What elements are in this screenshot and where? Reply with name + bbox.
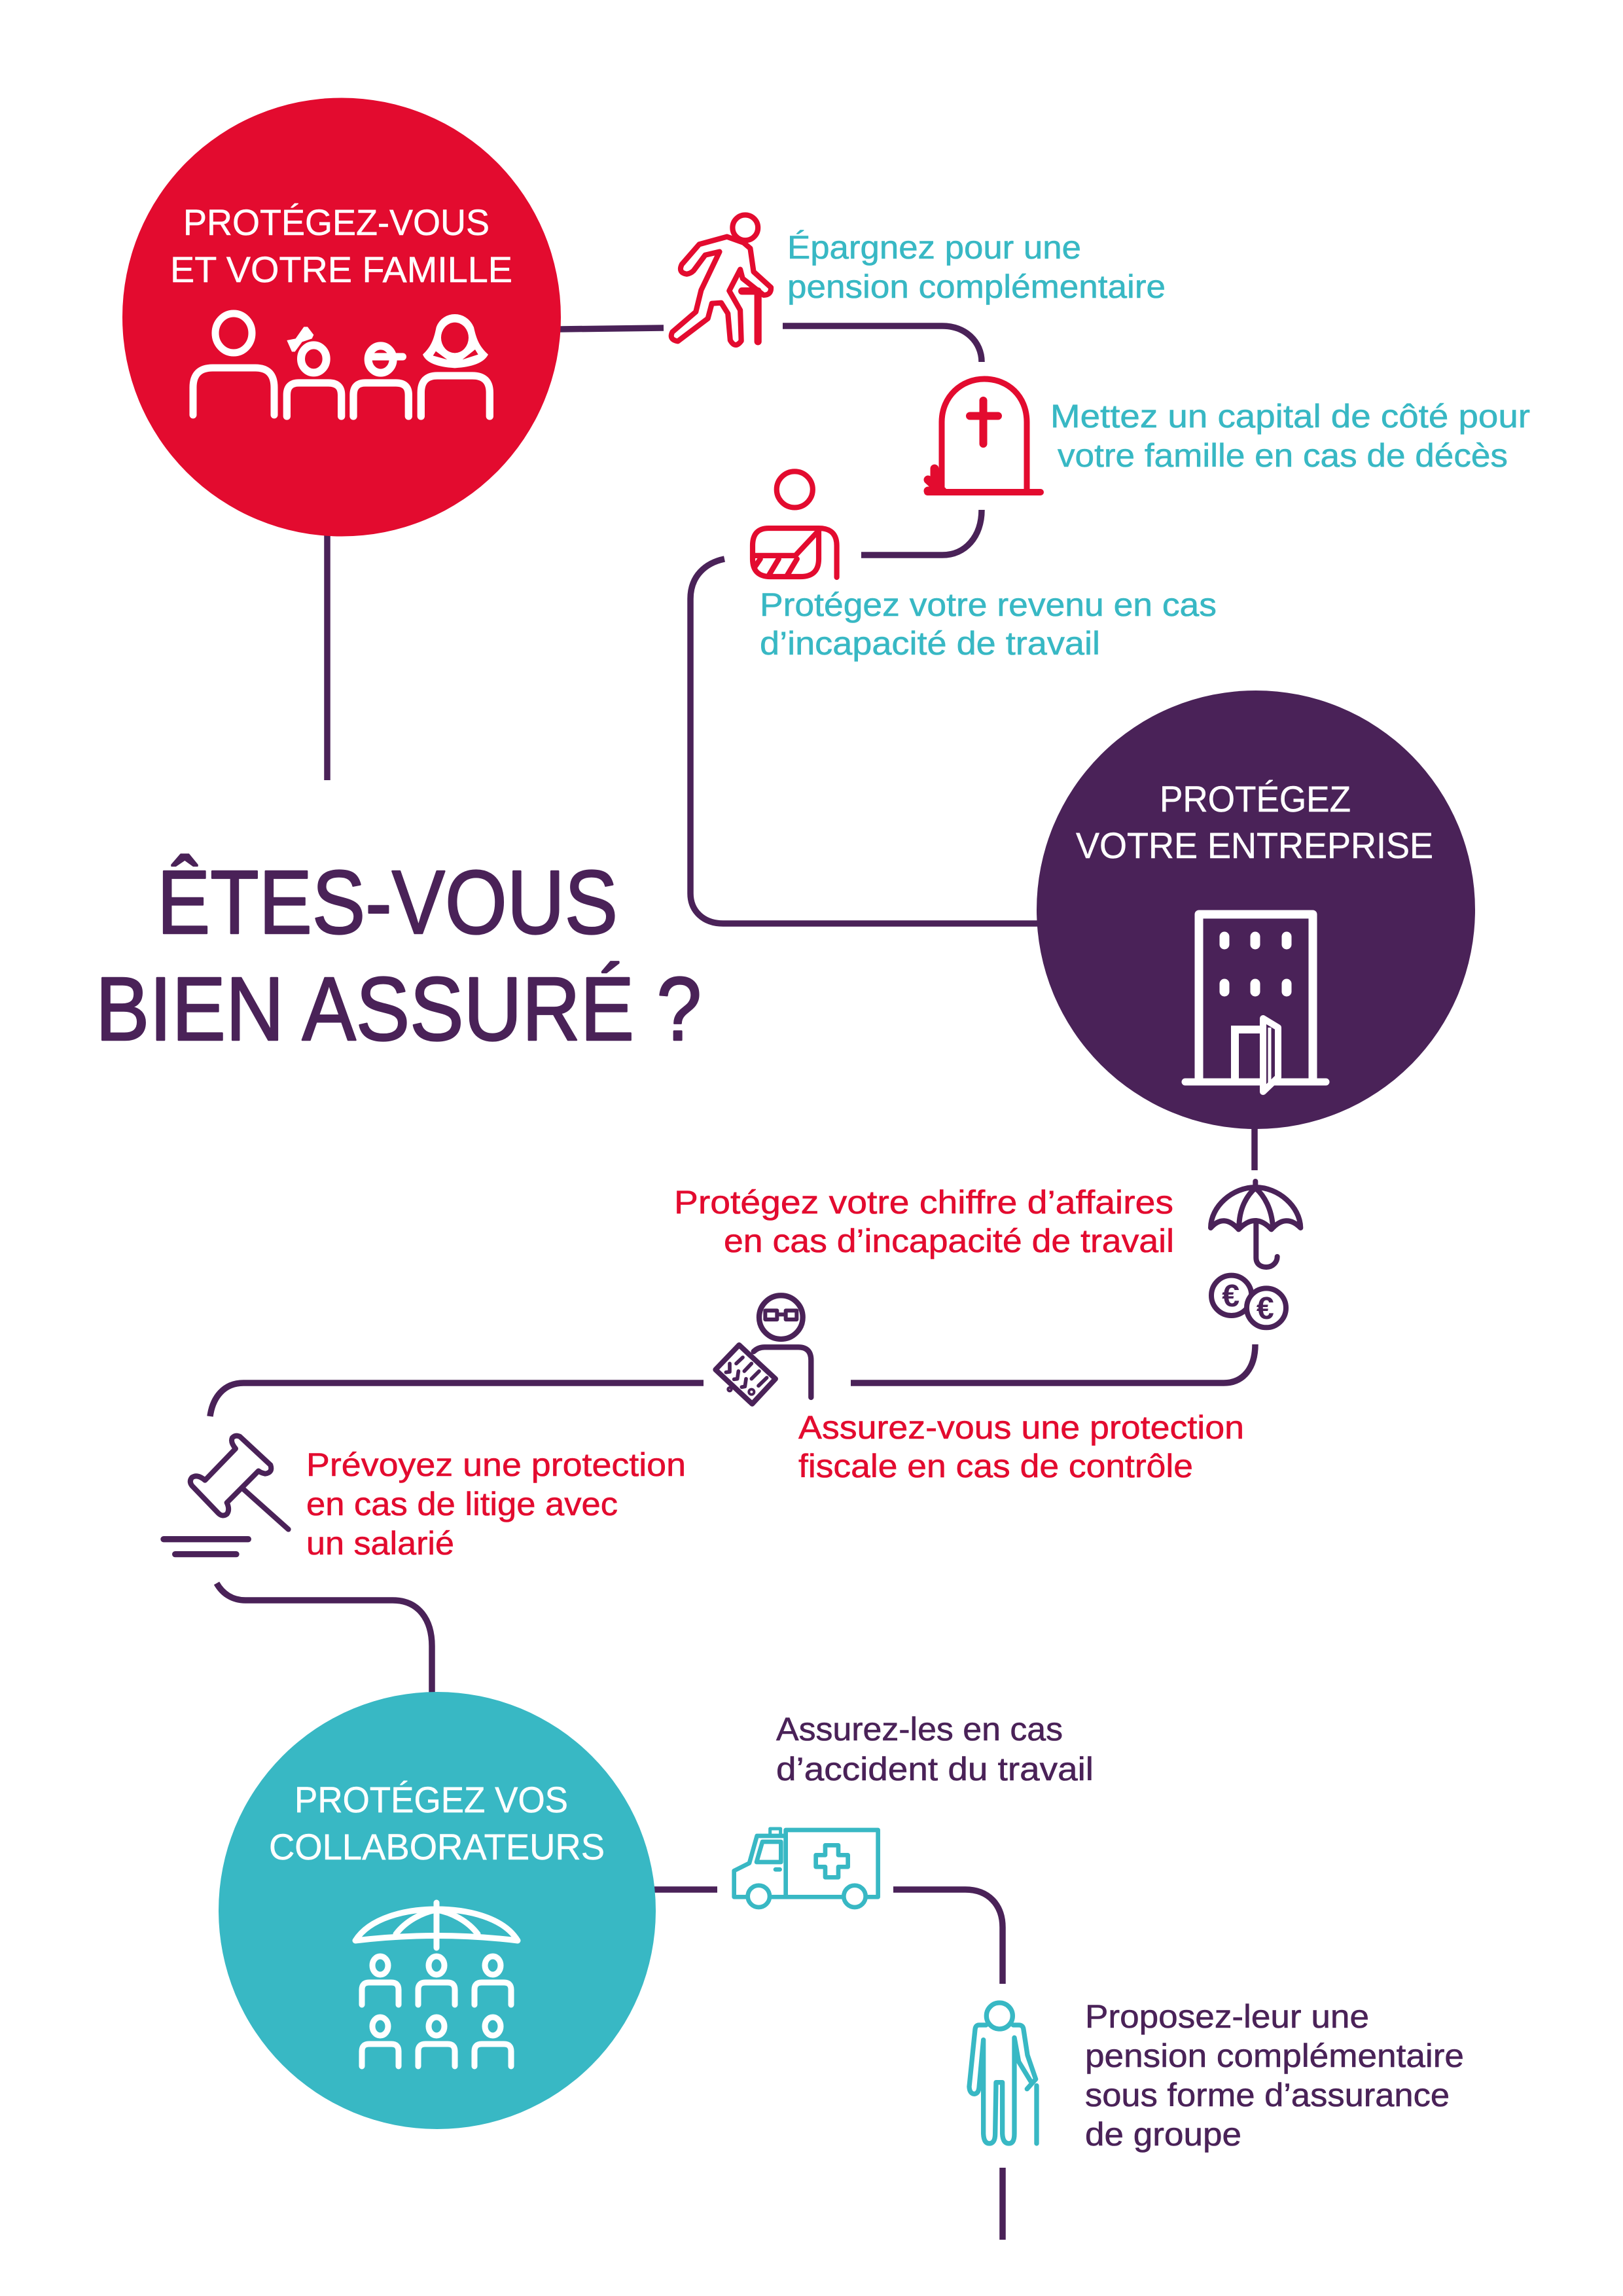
icon: tax inspector with clipboard — [715, 1295, 811, 1404]
icon: tombstone — [927, 379, 1041, 492]
icon: euro coins: € — [1222, 1278, 1240, 1314]
text: save for a pension — [787, 229, 1166, 305]
text: protect turnover: en cas d’incapacité de travail — [724, 1223, 1174, 1259]
connector: gavel to staff circle — [217, 1583, 432, 1695]
connector: company circle to umbrella — [1251, 1127, 1258, 1170]
text: group pension: de groupe — [1085, 2116, 1241, 2153]
text: capital for family in case of death: votre famille en cas de décès — [1058, 437, 1508, 474]
panel: staff circle — [219, 1692, 656, 2129]
icon: retired person walking with cane — [671, 215, 771, 345]
icon: elderly person with cane — [969, 2003, 1037, 2144]
heading: protect your staff — [269, 1779, 605, 1867]
icon: umbrella — [1211, 1181, 1300, 1267]
connector: coins to accountant — [851, 1344, 1255, 1383]
text: capital for family in case of death: Mettez un capital de côté pour — [1050, 398, 1530, 435]
text: tax protection: fiscale en cas de contrôle — [798, 1448, 1193, 1484]
icon: euro coins: € — [1257, 1291, 1274, 1326]
text: tax protection — [798, 1409, 1244, 1484]
text: employee dispute: Prévoyez une protection — [306, 1446, 686, 1483]
heading: protect yourself and family — [170, 202, 512, 290]
text: capital for family in case of death — [1050, 398, 1530, 474]
heading: protect your company: VOTRE ENTREPRISE — [1076, 825, 1433, 866]
text: work accident insurance: Assurez-les en cas — [776, 1711, 1063, 1748]
title: ÊTES-VOUS — [157, 852, 618, 953]
heading: protect your staff: COLLABORATEURS — [269, 1826, 605, 1867]
text: group pension: pension complémentaire — [1085, 2037, 1464, 2074]
text: work accident insurance — [776, 1711, 1094, 1787]
connector: ambulance to elderly person — [893, 1890, 1003, 1984]
heading: protect your company — [1076, 778, 1433, 866]
icon: office building — [1185, 914, 1326, 1092]
connector: walker to tombstone — [783, 326, 982, 362]
connector: injured person to company circle — [690, 559, 1038, 924]
text: protect income: d’incapacité de travail — [760, 625, 1100, 662]
panel: company circle — [1037, 691, 1475, 1129]
text: group pension: sous forme d’assurance — [1085, 2077, 1450, 2113]
heading: protect yourself and family: ET VOTRE FAMILLE — [170, 249, 512, 290]
text: save for a pension: pension complémentaire — [787, 268, 1166, 305]
text: work accident insurance: d’accident du travail — [776, 1751, 1094, 1787]
heading: protect your staff: PROTÉGEZ VOS — [294, 1779, 568, 1820]
text: employee dispute — [306, 1446, 686, 1562]
text: group pension: Proposez-leur une — [1085, 1998, 1369, 2035]
text: employee dispute: un salarié — [306, 1525, 454, 1562]
icon: euro coins — [1211, 1276, 1286, 1327]
icon: ambulance — [734, 1829, 878, 1907]
connector: tombstone to injured person — [861, 510, 982, 555]
text: protect income — [760, 586, 1217, 662]
title — [96, 852, 702, 1060]
text: protect turnover — [674, 1184, 1174, 1259]
text: protect turnover: Protégez votre chiffre d’affaires — [674, 1184, 1173, 1221]
connector: staff circle to ambulance — [654, 1886, 717, 1893]
connector: family circle to walker — [560, 328, 664, 329]
title: BIEN ASSURÉ ? — [96, 959, 702, 1060]
icon: family of four — [193, 314, 490, 416]
icon: umbrella over six people — [355, 1903, 518, 2066]
heading: protect your company: PROTÉGEZ — [1160, 778, 1351, 819]
connector: family circle to title — [324, 533, 330, 780]
connector: accountant to gavel — [210, 1383, 704, 1416]
connector: elderly person downward — [999, 2168, 1006, 2240]
icon: gavel — [164, 1436, 289, 1554]
text: employee dispute: en cas de litige avec — [306, 1486, 618, 1522]
text: tax protection: Assurez-vous une protection — [798, 1409, 1244, 1446]
panel: family circle — [122, 98, 561, 537]
text: save for a pension: Épargnez pour une — [787, 229, 1081, 266]
icon: person with arm in sling — [753, 471, 837, 577]
text: protect income: Protégez votre revenu en cas — [760, 586, 1217, 623]
heading: protect yourself and family: PROTÉGEZ-VOUS — [183, 202, 490, 243]
text: group pension — [1085, 1998, 1464, 2153]
